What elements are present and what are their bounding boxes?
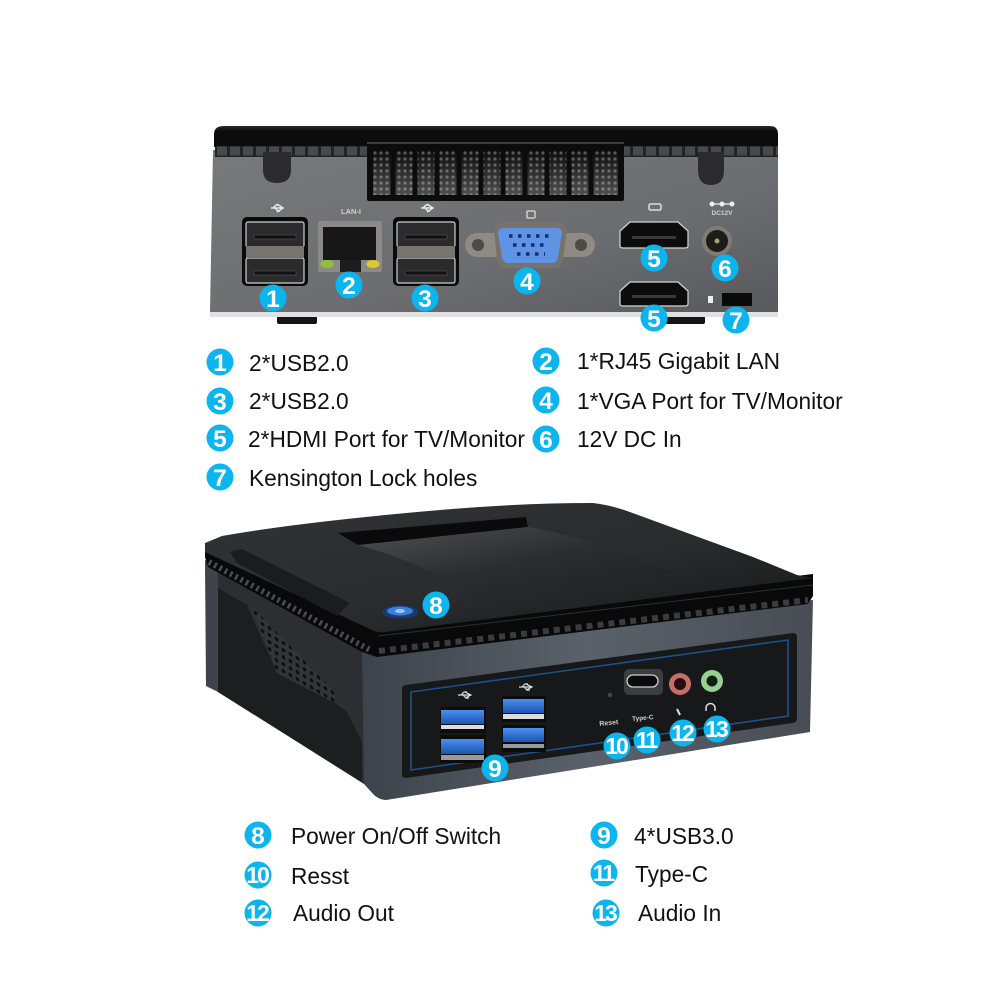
lan port [318, 221, 382, 272]
reset label: Reset [599, 719, 619, 728]
rear gray body [210, 150, 778, 312]
legend item 6: 6 [539, 427, 553, 454]
legend item 11: 11 [593, 860, 615, 886]
lid raised hump [358, 527, 675, 597]
lock icon [708, 296, 713, 303]
usb port group 1 [242, 217, 308, 286]
usb3 port top right [502, 696, 546, 722]
legend item 10: 10 [246, 862, 269, 888]
rubber foot left [277, 316, 317, 324]
hdmi port lower [620, 282, 688, 306]
legend item 12 [244, 900, 395, 926]
legend item 9: 9 [597, 823, 611, 850]
lid band and teeth [205, 543, 813, 657]
badge 4 [514, 268, 540, 296]
badge 5 upper: 5 [647, 246, 661, 273]
badge 2: 2 [342, 273, 356, 300]
badge 3: 3 [418, 286, 432, 313]
rubber foot right [665, 316, 705, 324]
badge 3 [412, 284, 438, 313]
badge 1: 1 [266, 286, 280, 313]
power button [382, 606, 418, 618]
lid top [205, 503, 813, 632]
vent grille [367, 142, 624, 201]
front port legend [244, 822, 734, 926]
badge 2 [336, 272, 362, 300]
audio out jack [669, 673, 691, 695]
badge 5 upper [640, 244, 668, 273]
rubber tab left [263, 152, 291, 183]
mic symbol [677, 709, 680, 715]
legend item 10: Resst [291, 863, 350, 889]
legend item 5: 2*HDMI Port for TV/Monitor [248, 426, 525, 452]
reset hole [608, 693, 612, 697]
legend item 11 [590, 860, 708, 887]
legend item 1 [206, 348, 349, 377]
side face [205, 560, 364, 784]
badge 9 [482, 754, 508, 783]
badge 8: 8 [429, 593, 443, 620]
legend item 6: 12V DC In [577, 426, 682, 452]
hdmi symbol [649, 204, 661, 210]
dc polarity symbol [710, 202, 734, 217]
badge 12: 12 [671, 720, 694, 746]
lan label: LAN-I [341, 207, 361, 216]
badge 13: 13 [705, 716, 728, 742]
vga port [465, 222, 595, 268]
legend item 2: 2 [539, 349, 553, 376]
lid slot [338, 517, 528, 545]
type-c port [624, 669, 663, 695]
front badges [422, 592, 730, 783]
legend item 1: 2*USB2.0 [249, 350, 349, 376]
legend item 7: 7 [213, 465, 227, 492]
dc jack [702, 226, 732, 256]
legend item 12: 12 [246, 900, 269, 926]
badge 4: 4 [520, 269, 534, 296]
legend item 7: Kensington Lock holes [249, 465, 477, 491]
badge 10: 10 [605, 733, 628, 759]
usb symbol left [271, 204, 283, 212]
legend item 5: 5 [213, 426, 227, 453]
badge 5 lower [640, 304, 668, 333]
hdmi port upper [620, 222, 688, 248]
usb symbol front right [519, 684, 532, 690]
black front panel [402, 633, 797, 778]
badge 9: 9 [488, 756, 502, 783]
usb port group 3 [393, 217, 459, 286]
rear port legend [206, 348, 843, 492]
legend item 4: 4 [539, 388, 553, 415]
legend item 13: 13 [594, 900, 617, 926]
usb3 port bottom left [440, 735, 486, 763]
legend item 13 [592, 900, 721, 926]
legend item 10 [244, 862, 350, 889]
side gray strip [205, 563, 218, 692]
legend item 4: 1*VGA Port for TV/Monitor [577, 388, 843, 414]
front gray face [362, 600, 813, 800]
dc polarity symbol: DC12V [712, 210, 733, 217]
vga symbol [527, 211, 535, 218]
legend item 11: Type-C [635, 861, 708, 887]
badge 8 [422, 592, 450, 620]
side vent [252, 607, 335, 703]
side lower panel [218, 588, 362, 782]
rear view of mini PC [210, 126, 778, 324]
legend item 2: 1*RJ45 Gigabit LAN [577, 348, 780, 374]
badge 5 lower: 5 [647, 306, 661, 333]
usb symbol front left [458, 692, 471, 698]
headphone symbol [706, 704, 715, 711]
legend item 3: 2*USB2.0 [249, 388, 349, 414]
front view of mini PC [205, 503, 813, 800]
badge 6 [712, 254, 738, 283]
legend item 6 [532, 426, 682, 454]
usb3 port top left [440, 707, 486, 733]
badge 11: 11 [636, 727, 658, 753]
bottom edge highlight [210, 312, 778, 317]
audio in jack [701, 670, 723, 692]
legend item 3: 3 [213, 389, 227, 416]
top badges [260, 244, 750, 335]
legend item 9: 4*USB3.0 [634, 823, 734, 849]
left lid ridge [230, 549, 350, 616]
legend item 8: 8 [251, 823, 265, 850]
legend item 9 [590, 822, 734, 850]
badge 1 [260, 284, 286, 313]
black lid [214, 126, 778, 147]
badge 6: 6 [718, 256, 732, 283]
legend item 12: Audio Out [293, 900, 395, 926]
usb3 port bottom right [502, 725, 546, 752]
kensington slot [722, 293, 752, 306]
lid teeth [215, 146, 778, 157]
legend item 3 [206, 388, 349, 416]
usb symbol right [421, 204, 433, 212]
type-c label: Type-C [632, 714, 654, 723]
badge 7: 7 [729, 308, 743, 335]
blue panel outline [411, 640, 788, 770]
rubber tab right [698, 152, 724, 185]
badge 7 [722, 306, 750, 335]
legend item 1: 1 [213, 350, 227, 377]
legend item 13: Audio In [638, 900, 721, 926]
legend item 8: Power On/Off Switch [291, 823, 501, 849]
